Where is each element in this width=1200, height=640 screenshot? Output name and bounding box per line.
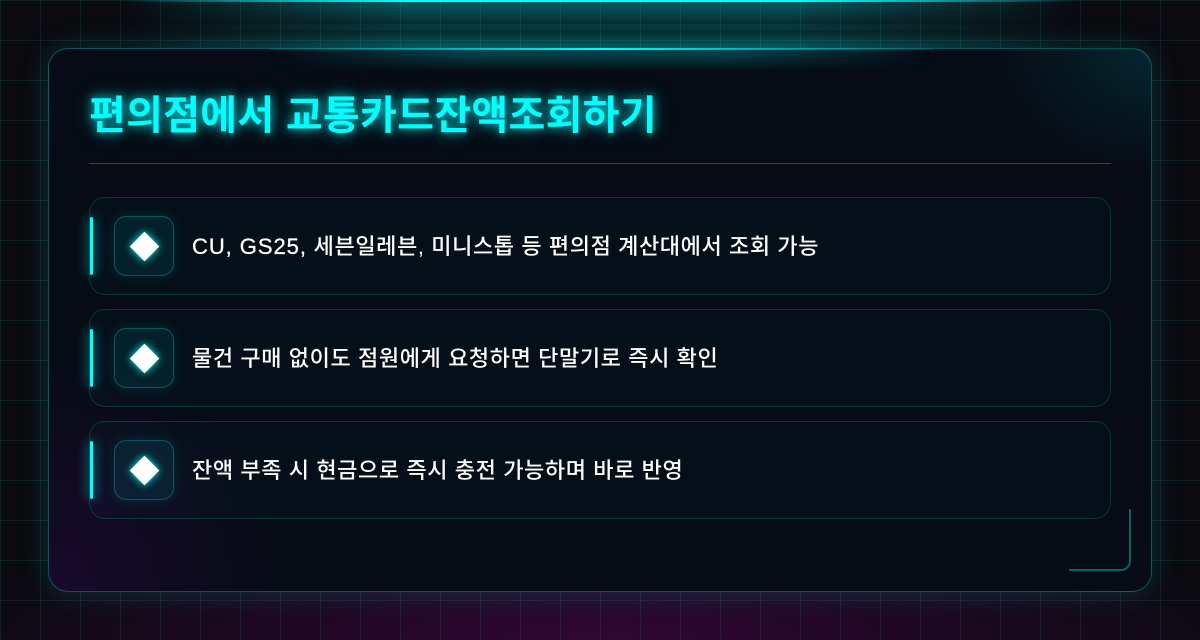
panel: main card [48, 48, 1152, 592]
icon: diamond 1 [114, 216, 174, 276]
card top glow line [269, 48, 933, 50]
card inner glow [298, 50, 904, 69]
corner bracket [1069, 509, 1131, 571]
item text 1: CU, GS25, 세븐일레븐, 미니스톱 등 편의점 계산대에서 조회 가능 [192, 234, 819, 259]
list item 1 [89, 197, 1111, 295]
item text 2: 물건 구매 없이도 점원에게 요청하면 단말기로 즉시 확인 [192, 346, 718, 371]
list item 3 [89, 421, 1111, 519]
top glow bar [120, 0, 1080, 2]
icon: diamond 2 [114, 328, 174, 388]
item text 3: 잔액 부족 시 현금으로 즉시 충전 가능하며 바로 반영 [192, 458, 683, 483]
accent bar 3 [90, 441, 93, 499]
list item 2 [89, 309, 1111, 407]
accent bar 2 [90, 329, 93, 387]
icon: diamond 3 [114, 440, 174, 500]
glow above card [161, 24, 1040, 48]
title: 편의점에서 교통카드잔액조회하기 [89, 94, 657, 138]
top glow band [120, 0, 1080, 30]
accent bar 1 [90, 217, 93, 275]
